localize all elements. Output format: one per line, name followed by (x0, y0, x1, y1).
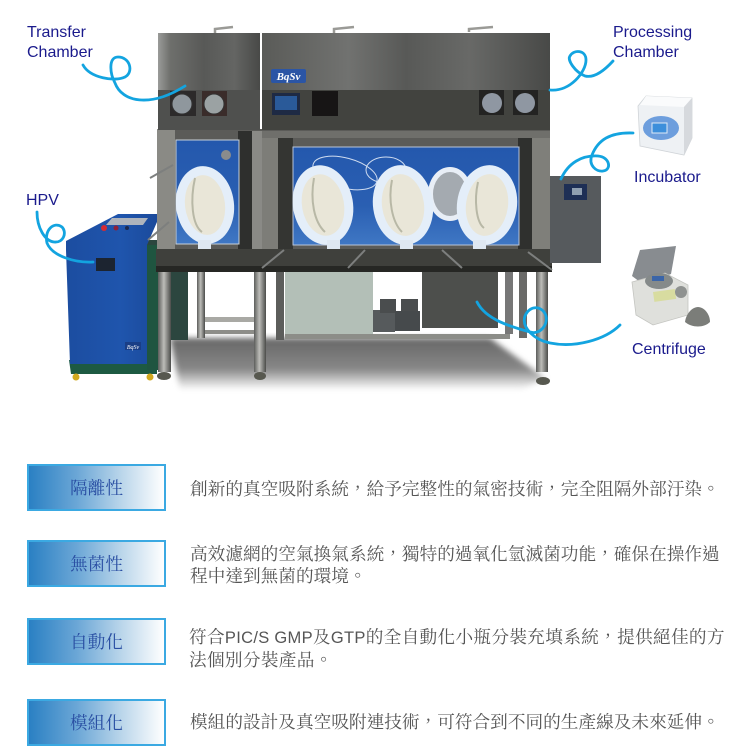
side control box (550, 176, 601, 263)
glove ports (171, 160, 522, 250)
callout labels (26, 24, 706, 358)
upper frame (157, 129, 550, 251)
floor shadow (170, 338, 545, 390)
callout labels: Incubator (634, 169, 701, 186)
label: isolation (27, 464, 166, 511)
table (156, 249, 552, 267)
lifting handles (215, 27, 493, 33)
text: sterility: 高效濾網的空氣換氣系統，獨特的過氧化氫滅菌功能，確保在操作過 (190, 544, 720, 564)
label: sterility: 無菌性 (70, 554, 123, 574)
text: automation (189, 627, 725, 670)
text: automation: 法個別分裝產品。 (189, 650, 333, 670)
processing chamber window (293, 147, 519, 245)
label: isolation: 隔離性 (70, 478, 123, 498)
rotor (685, 307, 710, 326)
text: sterility (190, 544, 720, 586)
text: modularity: 模組的設計及真空吸附連技術，可符合到不同的生產線及未來延伸。 (190, 712, 720, 732)
text: automation: 符合PIC/S GMP及GTP的全自動化小瓶分裝充填系統，提供絕佳的方 (189, 627, 725, 647)
transfer chamber window (176, 140, 239, 244)
transfer chamber hood (158, 33, 260, 130)
clamps (148, 165, 552, 270)
glove port: small (428, 167, 472, 221)
text: sterility: 程中達到無菌的環境。 (190, 566, 367, 586)
text: isolation: 創新的真空吸附系統，給予完整性的氣密技術，完全阻隔外部汙染。 (190, 479, 720, 499)
incubator (638, 96, 692, 155)
equipment illustration (26, 24, 710, 390)
label: automation (27, 618, 166, 665)
processing chamber hood: BqSv (276, 71, 301, 83)
callout curves (37, 51, 633, 344)
centrifuge (632, 246, 710, 326)
callout labels: Processing (613, 24, 692, 41)
back legs and panel (197, 272, 205, 338)
callout labels: Chamber (27, 44, 93, 61)
callout labels: HPV (26, 192, 59, 209)
label: modularity (27, 699, 166, 746)
vacuum pump (373, 299, 420, 332)
label: modularity: 模組化 (70, 713, 123, 733)
processing and transfer chamber machine (148, 27, 552, 385)
callout labels: Chamber (613, 44, 679, 61)
label: automation: 自動化 (70, 632, 123, 652)
callout labels: Centrifuge (632, 341, 706, 358)
HPV generator: BqSv (127, 345, 140, 351)
callout labels: Transfer (27, 24, 87, 41)
front legs (158, 272, 171, 372)
small inner hoop outlines (309, 150, 406, 196)
HPV generator (66, 214, 188, 380)
processing chamber hood (262, 33, 550, 130)
label: sterility (27, 540, 166, 587)
